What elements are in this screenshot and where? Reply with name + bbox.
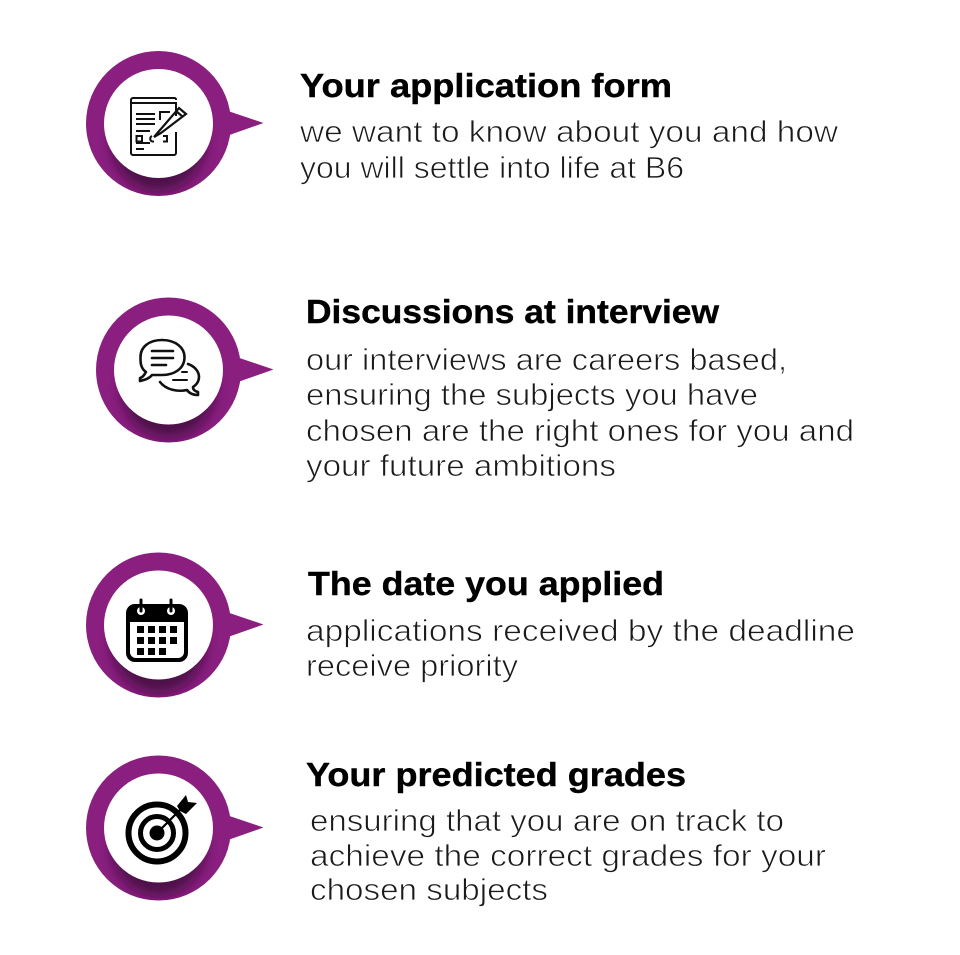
heading: Discussions at interview (306, 293, 719, 330)
body text (310, 803, 826, 907)
body text: chosen are the right ones for you and (306, 413, 854, 448)
body text: your future ambitions (306, 448, 616, 483)
body text: receive priority (306, 648, 519, 683)
badge: purple speech ring (96, 298, 274, 442)
body text (306, 613, 855, 683)
body text: achieve the correct grades for your (310, 838, 826, 873)
body text (299, 114, 839, 185)
body text: we want to know about you and how (299, 114, 839, 149)
badge: purple speech ring (86, 51, 264, 196)
body text (306, 342, 854, 483)
heading: Your application form (300, 67, 672, 104)
icon: form and pencil (131, 98, 186, 155)
body text: ensuring the subjects you have (306, 377, 758, 412)
panel: date you applied (86, 552, 855, 698)
badge: purple speech ring (86, 756, 264, 900)
icon: target and arrow (128, 795, 197, 862)
icon: chat bubbles (140, 340, 199, 395)
heading: Your predicted grades (306, 756, 686, 793)
heading: The date you applied (308, 565, 664, 602)
panel: discussions at interview (96, 293, 854, 483)
body text: ensuring that you are on track to (310, 803, 784, 838)
body text: our interviews are careers based, (306, 342, 787, 377)
badge: purple speech ring (86, 552, 264, 698)
panel: application form (86, 51, 839, 196)
icon: calendar (126, 600, 188, 662)
body text: chosen subjects (310, 872, 548, 907)
panel: predicted grades (86, 756, 826, 907)
body text: applications received by the deadline (306, 613, 855, 648)
body text: you will settle into life at B6 (300, 150, 684, 185)
